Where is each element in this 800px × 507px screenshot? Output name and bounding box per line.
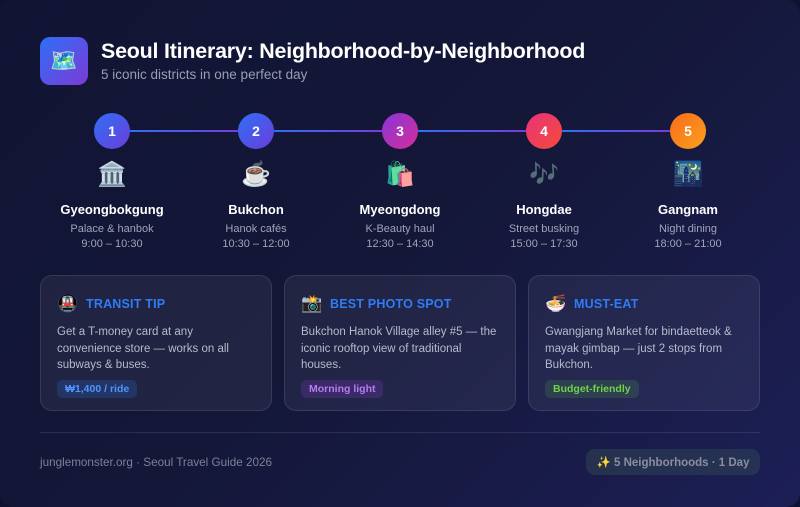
panel: must-eat: MUST-EAT [574,297,639,311]
panel: best photo spot: Morning light [309,382,375,394]
panel: best photo spot: BEST PHOTO SPOT [330,297,452,311]
stop: Hongdae [509,161,579,250]
stop: Gyeongbokgung: Palace & hanbok [70,223,154,235]
footer badge [586,449,760,475]
step 3 circle [382,113,418,149]
panel: transit tip: ₩1,400 / ride [65,382,129,394]
stop: Myeongdong: 🛍️ [385,161,415,188]
stop: Hongdae: 🎶 [529,161,559,188]
header icon [40,37,88,85]
stop: Gangnam: Night dining [659,223,717,235]
footer badge: ✨ 5 Neighborhoods · 1 Day [596,457,749,469]
stop: Gyeongbokgung: 🏛️ [97,161,127,188]
panel: best photo spot: 📸 [301,294,322,313]
panel: transit tip: 🚇 [57,294,78,313]
step 2 circle [238,113,274,149]
panel: best photo spot [284,275,516,411]
footer text: junglemonster.org · Seoul Travel Guide 2026 [40,456,272,469]
panel: transit tip: convenience store — works on all subways & buses. [57,342,229,371]
stop: Bukchon: 10:30 – 12:00 [222,238,290,250]
step 1 circle [94,113,130,149]
stop: Hongdae: Hongdae [516,202,572,217]
panel: must-eat [528,275,760,411]
timeline [60,113,722,250]
panel: must-eat: Gwangjang Market for bindaetteok & mayak gimbap — just 2 stops from Bukchon. [545,326,732,371]
stop: Gangnam [654,160,722,250]
panel: must-eat: 🍜 [545,294,566,313]
step 5 circle [670,113,706,149]
stop: Gangnam: 🌃 [673,161,703,188]
step 5 circle: 5 [684,123,692,139]
stop: Gangnam: Gangnam [658,202,718,217]
stop: Gyeongbokgung: 9:00 – 10:30 [81,238,143,250]
panel: transit tip: Get a T-money card at any [57,326,193,338]
title: Seoul Itinerary: Neighborhood-by-Neighborhood [101,39,585,63]
panel: transit tip [40,275,272,411]
step 3 circle: 3 [396,123,404,139]
stop: Bukchon: Hanok cafés [225,223,287,235]
stop: Myeongdong [360,160,440,250]
stop: Gyeongbokgung: Gyeongbokgung [60,202,164,217]
stop: Gyeongbokgung [60,160,164,250]
step 1 circle: 1 [108,123,116,139]
header icon: 🗺️ [50,48,78,73]
stop: Hongdae: 15:00 – 17:30 [510,238,578,250]
stop: Bukchon: Bukchon [228,202,284,217]
stop: Bukchon [222,160,290,250]
panel: best photo spot: Bukchon Hanok Village alley #5 — the iconic rooftop view of traditional houses. [301,326,496,371]
subtitle: 5 iconic districts in one perfect day [101,67,307,82]
stop: Myeongdong: 12:30 – 14:30 [366,238,434,250]
stop: Bukchon: ☕ [241,161,271,188]
stop: Myeongdong: Myeongdong [360,202,440,217]
stop: Myeongdong: K-Beauty haul [365,223,435,235]
step 2 circle: 2 [252,123,260,139]
panel: transit tip: TRANSIT TIP [86,297,165,311]
stop: Gangnam: 18:00 – 21:00 [654,238,722,250]
stop: Hongdae: Street busking [509,223,579,235]
panel: must-eat: Budget-friendly [553,382,631,394]
step 4 circle [526,113,562,149]
step 4 circle: 4 [540,123,548,139]
